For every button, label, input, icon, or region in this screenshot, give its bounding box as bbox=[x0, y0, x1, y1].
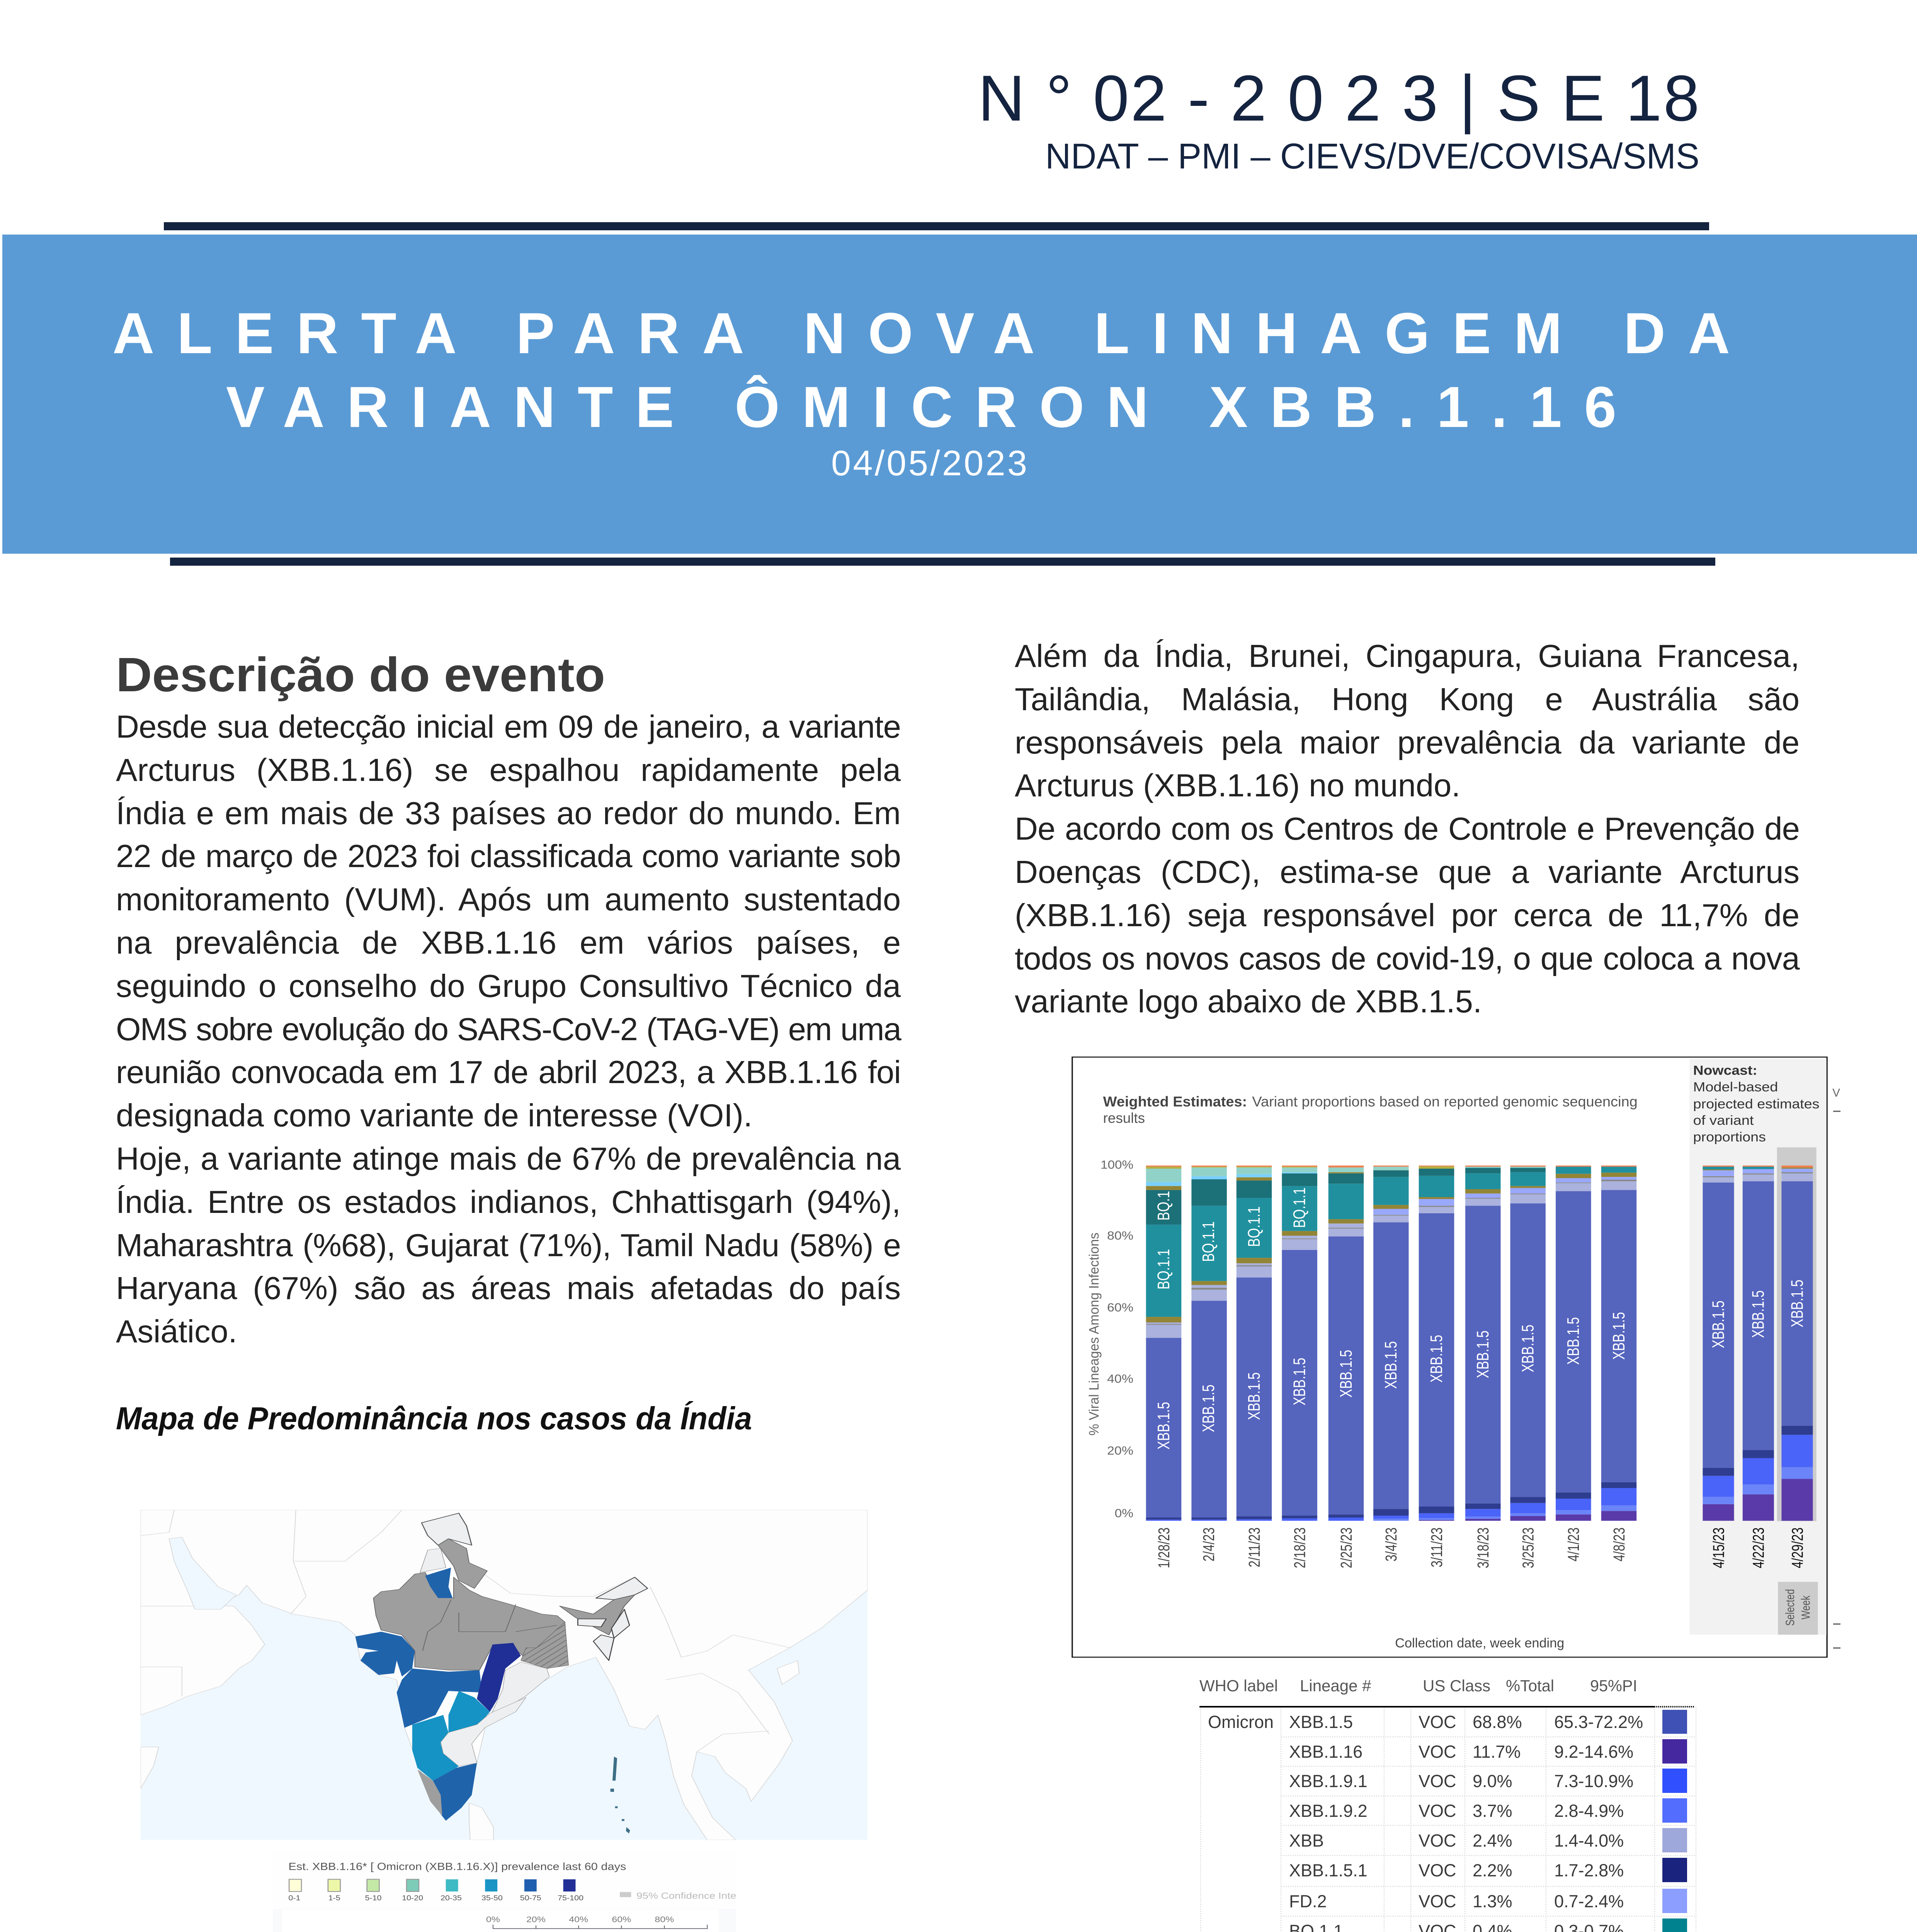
caption of map and chart bbox=[0, 0, 927, 1932]
title band bbox=[2, 235, 1917, 554]
table header: Lineage # bbox=[1300, 1677, 1371, 1695]
bar labels: XBB.1.5 bbox=[1610, 1312, 1628, 1360]
text block: left column bbox=[116, 618, 901, 1391]
bar labels: BQ.1.1 bbox=[1245, 1206, 1264, 1247]
week labels: 1/28/23 bbox=[1155, 1527, 1173, 1568]
issue number bbox=[0, 0, 1917, 193]
Andaman islands bbox=[611, 1757, 630, 1833]
table rows: 2.2% bbox=[1473, 1861, 1512, 1880]
table rows: VOC bbox=[1419, 1801, 1456, 1821]
week labels: 3/18/23 bbox=[1474, 1527, 1492, 1568]
week labels: 4/29/23 bbox=[1789, 1527, 1806, 1568]
nowcast panel bbox=[1689, 1058, 1827, 1635]
land bbox=[141, 1510, 867, 1840]
text block: right column: todos os novos casos de covid-19, o que coloca a nova bbox=[1015, 940, 1800, 976]
northeast states bbox=[596, 1577, 648, 1600]
bar labels: XBB.1.5 bbox=[1155, 1402, 1173, 1450]
department line: NDAT – PMI – CIEVS/DVE/COVISA/SMS bbox=[1045, 136, 1699, 176]
table rows: 9.0% bbox=[1473, 1771, 1512, 1791]
text block: right column: Tailândia, Malásia, Hong Kong e Austrália são bbox=[1015, 681, 1800, 717]
lower rule bbox=[170, 558, 1715, 566]
nowcast panel: Nowcast: bbox=[1693, 1063, 1757, 1078]
table rows: 3.7% bbox=[1473, 1801, 1512, 1821]
Telangana bbox=[449, 1691, 490, 1733]
table rows: Omicron bbox=[1208, 1712, 1274, 1732]
text block: left column: 22 de março de 2023 foi classificada como variante sob bbox=[116, 838, 901, 874]
title: ALERTA PARA NOVA LINHAGEM DA bbox=[112, 301, 1730, 366]
nowcast panel: Selected bbox=[1783, 1589, 1797, 1626]
top axis bbox=[486, 1915, 674, 1924]
legend: 10-20 bbox=[402, 1894, 423, 1902]
x axis title: Collection date, week ending bbox=[1395, 1636, 1564, 1650]
text block: left column: Arcturus (XBB.1.16) se espalhou rapidamente pela bbox=[116, 752, 901, 788]
swatches bbox=[1662, 1710, 1687, 1932]
week labels: 4/15/23 bbox=[1710, 1527, 1727, 1568]
variant proportions stacked bar chart: V bbox=[1832, 1087, 1840, 1099]
bar labels: XBB.1.5 bbox=[1337, 1350, 1356, 1398]
bar labels bbox=[1155, 1187, 1806, 1450]
top axis: 0% bbox=[486, 1915, 500, 1924]
map of India bbox=[141, 1510, 867, 1840]
y axis: 40% bbox=[1107, 1372, 1133, 1386]
text block: right column: Doenças (CDC), estima-se que a variante Arcturus bbox=[1015, 854, 1800, 890]
text block: right column: responsáveis pela maior prevalência da variante de bbox=[1015, 724, 1800, 760]
top rule bbox=[164, 222, 1709, 230]
bar labels: BQ.1.1 bbox=[1199, 1221, 1218, 1262]
Gujarat bbox=[356, 1632, 415, 1677]
lollipop chart: 95% Confidence Inte bbox=[636, 1891, 736, 1901]
y axis: 80% bbox=[1107, 1229, 1133, 1242]
text block: left column: Haryana (67%) são as áreas mais afetadas do país bbox=[116, 1270, 901, 1306]
table rows: XBB.1.5.1 bbox=[1289, 1861, 1368, 1880]
y axis: 60% bbox=[1107, 1301, 1133, 1314]
week labels: 4/8/23 bbox=[1610, 1527, 1628, 1561]
Tamil Nadu bbox=[433, 1763, 477, 1821]
bar labels: XBB.1.5 bbox=[1291, 1358, 1309, 1405]
table header: WHO label bbox=[1199, 1677, 1278, 1695]
Maharashtra bbox=[397, 1668, 482, 1728]
text block: right column bbox=[1015, 618, 1800, 1391]
title bbox=[112, 301, 1730, 439]
bar labels: BQ.1.1 bbox=[1155, 1249, 1173, 1289]
nowcast panel: Model-based bbox=[1693, 1080, 1778, 1094]
bar labels: XBB.1.5 bbox=[1427, 1335, 1446, 1383]
table rows: 11.7% bbox=[1473, 1742, 1521, 1762]
bar labels: XBB.1.5 bbox=[1749, 1290, 1768, 1338]
text block: left column: Hoje, a variante atinge mais de 67% de prevalência na bbox=[116, 1141, 901, 1177]
text block: left column: designada como variante de interesse (VOI). bbox=[116, 1097, 752, 1133]
chart subtitle: Variant proportions based on reported genomic sequencing bbox=[1252, 1094, 1638, 1109]
table rows: VOC bbox=[1419, 1742, 1456, 1762]
map heading: Mapa de Predominância nos casos da Índia bbox=[116, 1400, 752, 1436]
table rows bbox=[1208, 1712, 1643, 1932]
top axis: 60% bbox=[612, 1915, 631, 1924]
table header: 95%PI bbox=[1590, 1677, 1637, 1695]
legend bbox=[288, 1879, 583, 1902]
table rows: 65.3-72.2% bbox=[1554, 1712, 1643, 1732]
weekly bars bbox=[1163, 1165, 1619, 1521]
bar labels: BQ.1 bbox=[1155, 1191, 1173, 1221]
source link left bbox=[0, 0, 927, 1932]
table rows: 2.4% bbox=[1473, 1831, 1512, 1850]
nowcast panel: Week bbox=[1799, 1595, 1812, 1619]
top axis: 20% bbox=[526, 1915, 546, 1924]
text block: left column: seguindo o conselho do Grupo Consultivo Técnico da bbox=[116, 968, 901, 1004]
table rows: XBB.1.16 bbox=[1289, 1742, 1362, 1762]
legend: 1-5 bbox=[328, 1894, 340, 1902]
chart title: Est. XBB.1.16* [ Omicron (XBB.1.16.X)] prevalence last 60 days bbox=[288, 1861, 626, 1872]
bar labels: XBB.1.5 bbox=[1199, 1384, 1218, 1432]
text block: right column: (XBB.1.16) seja responsável por cerca de 11,7% de bbox=[1015, 897, 1800, 933]
white panel behind table bbox=[1194, 1662, 1716, 1932]
issue number: N ° 02 - 2 0 2 3 | S E 18 bbox=[978, 62, 1699, 135]
text block: left column: Índia e em mais de 33 países ao redor do mundo. Em bbox=[116, 795, 901, 831]
nowcast panel: proportions bbox=[1693, 1130, 1766, 1145]
text block: left column: Desde sua detecção inicial em 09 de janeiro, a variante bbox=[116, 709, 901, 745]
table header bbox=[1199, 1677, 1637, 1695]
week labels: 3/11/23 bbox=[1428, 1527, 1446, 1567]
text block: right column: De acordo com os Centros de Controle e Prevenção de bbox=[1015, 811, 1800, 847]
text block: right column: variante logo abaixo de XBB.1.5. bbox=[1015, 983, 1482, 1019]
week labels: 4/1/23 bbox=[1565, 1527, 1582, 1561]
variant proportions stacked bar chart: % Viral Lineages Among Infections bbox=[1086, 1233, 1102, 1435]
nowcast bars bbox=[1718, 1165, 1797, 1521]
table rows: 2.8-4.9% bbox=[1554, 1801, 1624, 1821]
Chhattisgarh bbox=[477, 1643, 521, 1712]
text block: left column: OMS sobre evolução do SARS-CoV-2 (TAG-VE) em uma bbox=[116, 1011, 901, 1047]
y axis: 100% bbox=[1101, 1158, 1133, 1171]
text block: left column: monitoramento (VUM). Após um aumento sustentado bbox=[116, 881, 901, 917]
bar labels: XBB.1.5 bbox=[1474, 1330, 1492, 1378]
Karnataka bbox=[412, 1715, 459, 1781]
table rows: 1.4-4.0% bbox=[1554, 1831, 1624, 1850]
bar labels: XBB.1.5 bbox=[1382, 1341, 1400, 1389]
table rows: XBB bbox=[1289, 1831, 1324, 1850]
date: 04/05/2023 bbox=[831, 444, 1027, 483]
chart subtitle: results bbox=[1103, 1110, 1145, 1126]
legend: 35-50 bbox=[481, 1894, 503, 1902]
heading: descrição do evento: Descrição do evento bbox=[116, 648, 605, 702]
table rows: 0.7-2.4% bbox=[1554, 1891, 1624, 1911]
table rows: VOC bbox=[1419, 1712, 1456, 1732]
table rows: 7.3-10.9% bbox=[1554, 1771, 1633, 1791]
y axis: 0% bbox=[1115, 1507, 1133, 1520]
legend: 20-35 bbox=[441, 1894, 462, 1902]
Odisha bbox=[492, 1662, 549, 1712]
bar labels: XBB.1.5 bbox=[1245, 1372, 1264, 1420]
text block: left column: na prevalência de XBB.1.16 em vários países, e bbox=[116, 925, 901, 961]
table rows: 1.7-2.8% bbox=[1554, 1861, 1624, 1880]
text block: right column: Arcturus (XBB.1.16) no mundo. bbox=[1015, 767, 1460, 803]
text block: left column: Maharashtra (%68), Gujarat (71%), Tamil Nadu (58%) e bbox=[116, 1227, 901, 1263]
table rows: VOC bbox=[1419, 1891, 1456, 1911]
table rows: VOC bbox=[1419, 1861, 1456, 1880]
week labels bbox=[1155, 1527, 1806, 1568]
table rows: 68.8% bbox=[1473, 1712, 1522, 1732]
bar labels: XBB.1.5 bbox=[1709, 1301, 1728, 1348]
table rows: XBB.1.5 bbox=[1289, 1712, 1353, 1732]
bar labels: XBB.1.5 bbox=[1564, 1317, 1583, 1365]
bar labels: BQ.1.1 bbox=[1291, 1187, 1309, 1228]
table rows: 9.2-14.6% bbox=[1554, 1742, 1633, 1762]
Punjab bbox=[420, 1548, 446, 1572]
table rows: VOC bbox=[1419, 1771, 1456, 1791]
nowcast panel: projected estimates bbox=[1693, 1097, 1819, 1111]
week labels: 2/25/23 bbox=[1337, 1527, 1355, 1568]
y axis: 20% bbox=[1107, 1444, 1133, 1457]
text block: right column: Além da Índia, Brunei, Cingapura, Guiana Francesa, bbox=[1015, 638, 1800, 674]
table header: %Total bbox=[1506, 1677, 1554, 1695]
legend: 5-10 bbox=[365, 1894, 382, 1902]
table header: US Class bbox=[1423, 1677, 1490, 1695]
table rows: XBB.1.9.1 bbox=[1289, 1771, 1368, 1791]
table rows: FD.2 bbox=[1289, 1891, 1327, 1911]
Haryana bbox=[425, 1568, 452, 1598]
week labels: 2/18/23 bbox=[1291, 1527, 1308, 1568]
Kerala bbox=[417, 1769, 442, 1816]
week labels: 2/4/23 bbox=[1200, 1527, 1218, 1561]
week labels: 2/11/23 bbox=[1245, 1527, 1263, 1567]
Andhra Pradesh bbox=[441, 1697, 526, 1766]
title: VARIANTE ÔMICRON XBB.1.16 bbox=[226, 374, 1616, 439]
gray north states bbox=[438, 1539, 487, 1588]
week labels: 4/22/23 bbox=[1750, 1527, 1767, 1568]
bar labels: XBB.1.5 bbox=[1788, 1280, 1806, 1327]
y axis bbox=[1101, 1158, 1133, 1520]
table rows: XBB.1.9.2 bbox=[1289, 1801, 1368, 1821]
text block: left column: Índia. Entre os estados indianos, Chhattisgarh (94%), bbox=[116, 1184, 901, 1220]
table rows: 1.3% bbox=[1473, 1891, 1512, 1911]
top axis: 80% bbox=[655, 1915, 674, 1924]
legend: 0-1 bbox=[288, 1894, 300, 1902]
text block: left column: reunião convocada em 17 de abril 2023, a XBB.1.16 foi bbox=[116, 1054, 901, 1090]
chart subtitle: Weighted Estimates: bbox=[1103, 1094, 1247, 1109]
top axis: 40% bbox=[569, 1915, 588, 1924]
legend: 75-100 bbox=[558, 1894, 583, 1902]
week labels: 3/4/23 bbox=[1382, 1527, 1400, 1561]
J&K bbox=[422, 1513, 472, 1545]
table rows: VOC bbox=[1419, 1831, 1456, 1850]
legend: 50-75 bbox=[520, 1894, 541, 1902]
borders bbox=[141, 1510, 790, 1752]
week labels: 3/25/23 bbox=[1519, 1527, 1537, 1568]
bar labels: XBB.1.5 bbox=[1519, 1325, 1538, 1372]
text block: left column: Asiático. bbox=[116, 1313, 237, 1349]
nowcast panel: of variant bbox=[1693, 1113, 1754, 1128]
chart subtitle bbox=[1103, 1094, 1638, 1126]
